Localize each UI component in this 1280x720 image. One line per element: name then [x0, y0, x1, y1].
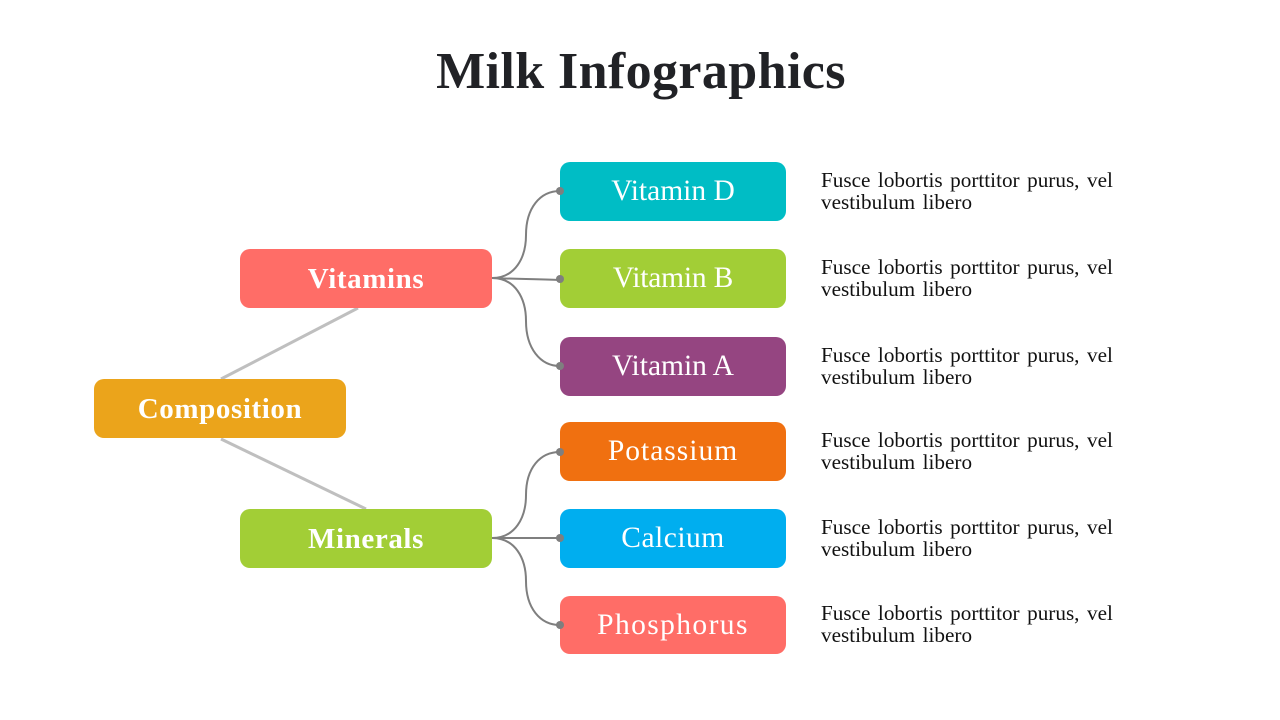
box: Potassium	[560, 422, 786, 481]
box: Vitamin B	[560, 249, 786, 308]
curves: minerals branch	[492, 452, 560, 625]
text: Vitamin B description: Fusce lobortis porttitor purus, vel	[821, 255, 1113, 279]
text: Phosphorus description: Fusce lobortis porttitor purus, vel	[821, 601, 1113, 625]
box: Vitamin A	[560, 337, 786, 396]
text: Phosphorus description: vestibulum libero	[821, 622, 972, 646]
box: Calcium: Calcium	[621, 522, 725, 554]
text: Vitamin B description	[821, 255, 1113, 300]
box: Vitamins: Vitamins	[308, 263, 424, 295]
text: Vitamin A description: vestibulum libero	[821, 364, 972, 388]
box: Vitamin D: Vitamin D	[611, 175, 735, 207]
box: Vitamin B: Vitamin B	[613, 262, 733, 294]
text: Calcium description: Fusce lobortis porttitor purus, vel	[821, 515, 1113, 539]
title: Milk Infographics	[436, 43, 846, 100]
box: Composition	[94, 379, 346, 438]
box: Phosphorus: Phosphorus	[597, 609, 749, 641]
text: Vitamin D description: vestibulum libero	[821, 190, 972, 214]
text: Potassium description: Fusce lobortis porttitor purus, vel	[821, 428, 1113, 452]
box: Minerals	[240, 509, 492, 568]
line: composition to vitamins	[221, 308, 358, 379]
line: composition to minerals	[221, 439, 366, 509]
text: Vitamin A description	[821, 343, 1113, 388]
text: Potassium description	[821, 428, 1113, 474]
text: Phosphorus description	[821, 601, 1113, 646]
text: Vitamin A description: Fusce lobortis porttitor purus, vel	[821, 343, 1113, 367]
text: Potassium description: vestibulum libero	[821, 450, 972, 474]
box: Composition: Composition	[138, 393, 302, 425]
box: Phosphorus	[560, 596, 786, 654]
box: Vitamin A: Vitamin A	[612, 350, 734, 382]
box: Calcium	[560, 509, 786, 568]
box: Potassium: Potassium	[608, 435, 738, 467]
text: Vitamin D description	[821, 168, 1113, 214]
text: Vitamin D description: Fusce lobortis porttitor purus, vel	[821, 168, 1113, 192]
text: Calcium description	[821, 515, 1113, 560]
curves: vitamins branch	[492, 191, 560, 366]
text: Vitamin B description: vestibulum libero	[821, 276, 972, 300]
box: Vitamin D	[560, 162, 786, 221]
box: Vitamins	[240, 249, 492, 308]
text: Calcium description: vestibulum libero	[821, 536, 972, 560]
box: Minerals: Minerals	[308, 523, 424, 555]
